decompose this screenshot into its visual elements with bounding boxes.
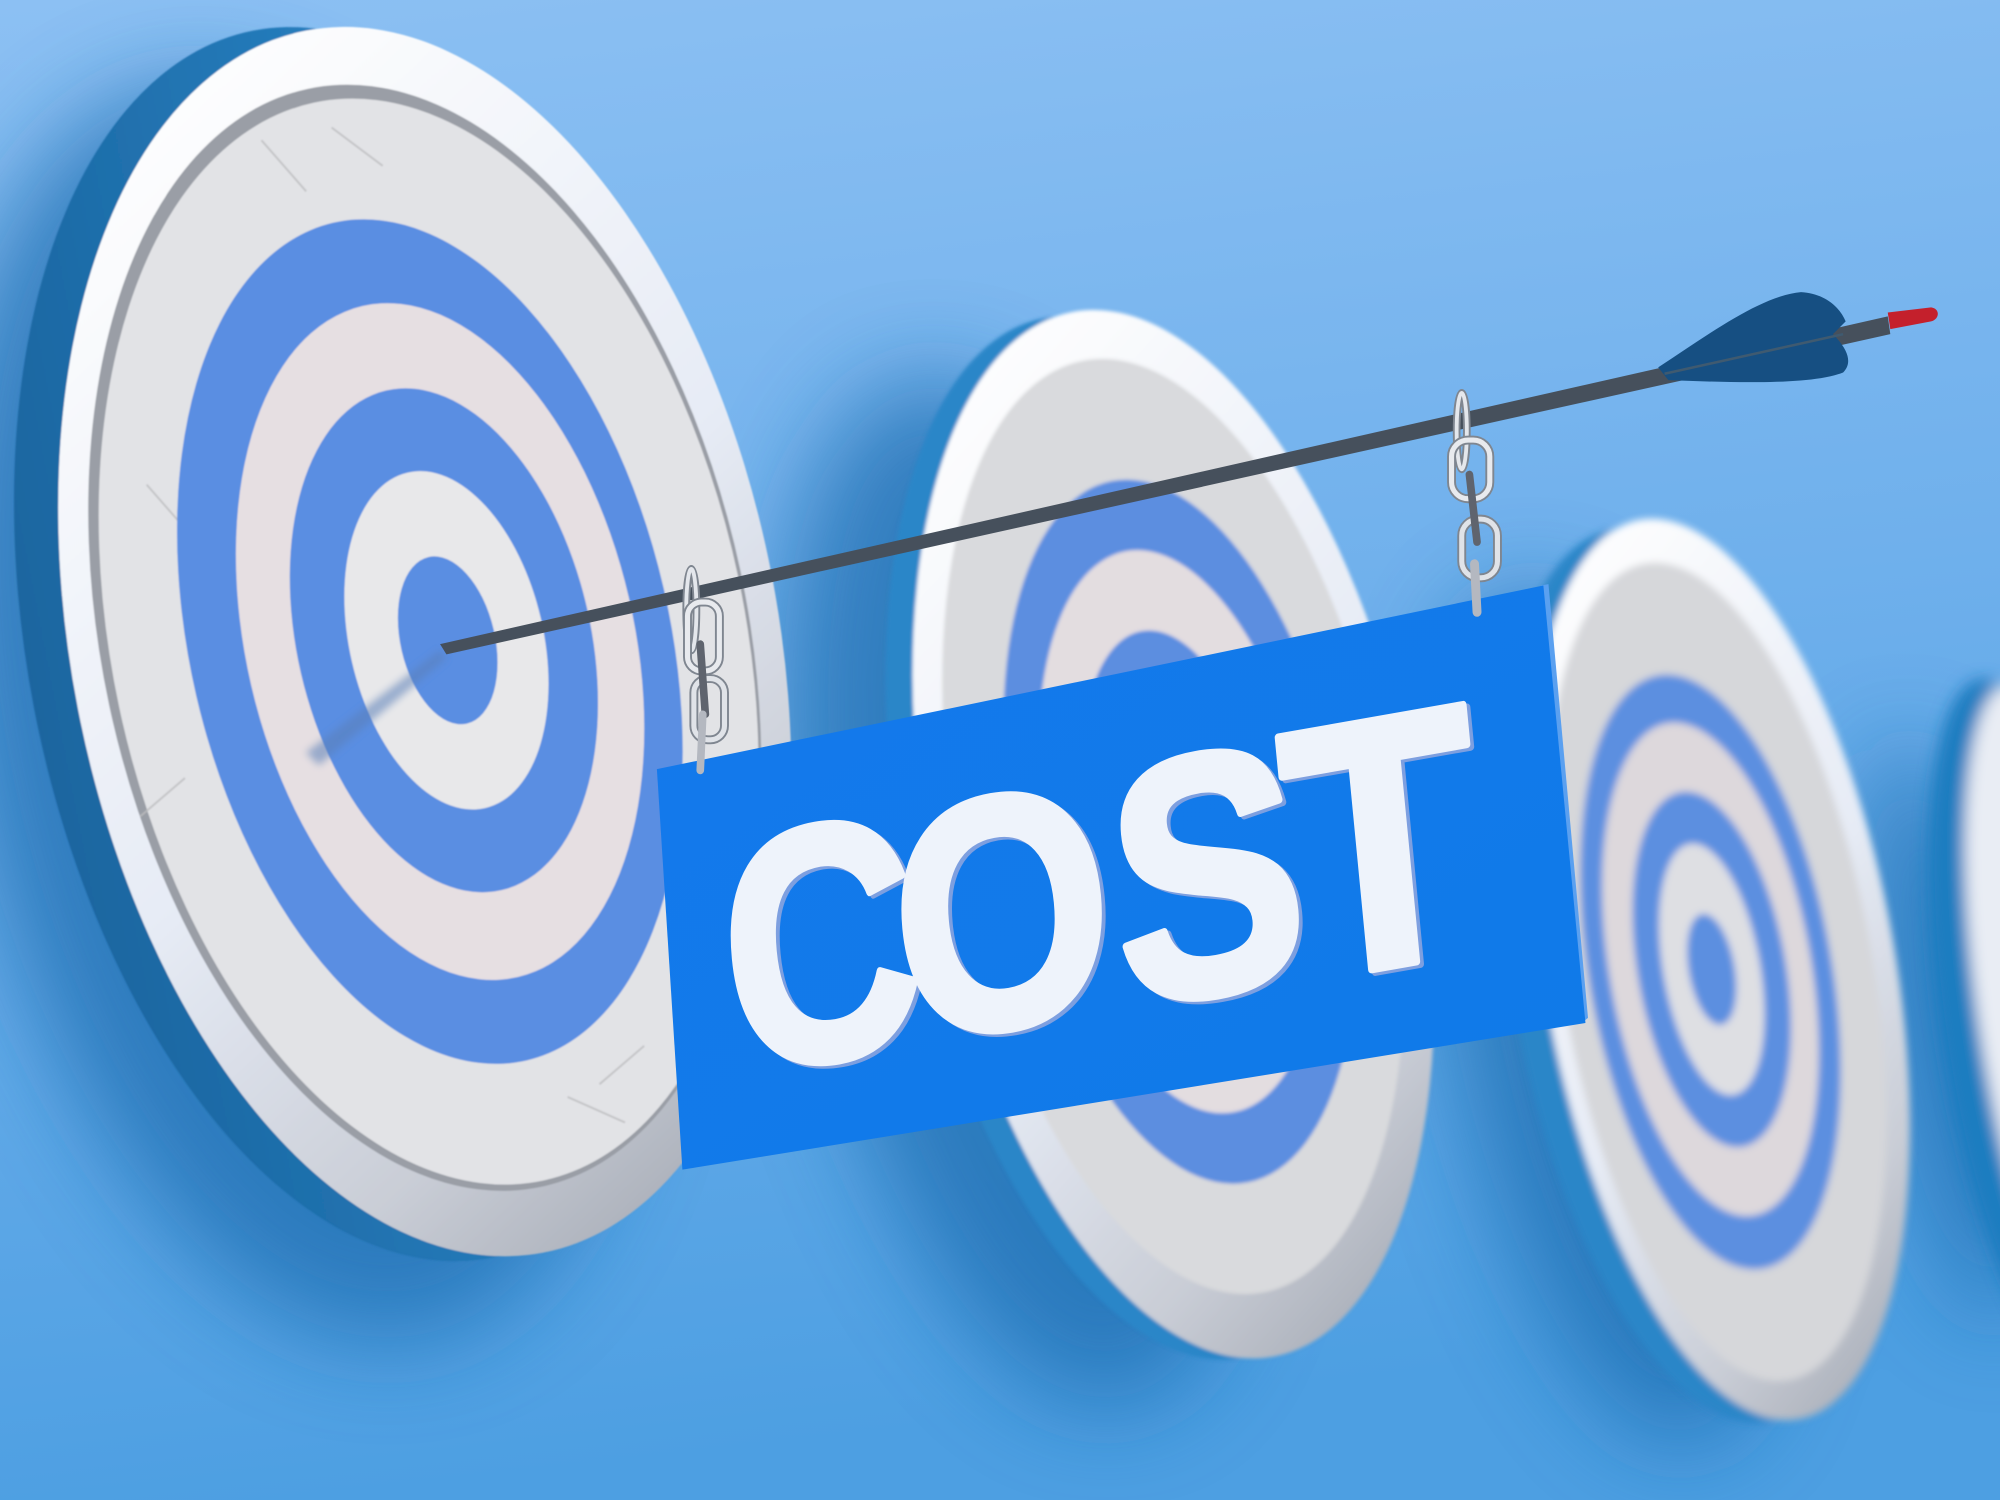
arrow shadow on target	[306, 651, 446, 765]
arrow shaft	[440, 316, 1890, 654]
letter shadows: S	[1098, 670, 1324, 1084]
arrow	[440, 292, 1938, 654]
letters	[706, 626, 1497, 1147]
letter shadows: C	[710, 743, 939, 1149]
face scratches	[140, 128, 644, 1122]
sign face	[657, 585, 1585, 1170]
target 2: mid	[805, 265, 1515, 1404]
target 4: far right	[1892, 667, 2000, 1374]
sign board	[657, 584, 1588, 1170]
letter shadows: T	[1271, 629, 1501, 1061]
chain: right	[1452, 393, 1497, 612]
arrow nock	[1888, 307, 1938, 329]
arrow fletching	[1658, 292, 1848, 382]
letter shadows: O	[880, 712, 1131, 1117]
sign lettering	[706, 626, 1501, 1149]
target 1: front	[0, 0, 890, 1323]
letters: O	[877, 710, 1127, 1114]
letters: T	[1267, 626, 1497, 1058]
sign edge	[1541, 584, 1588, 1023]
letters: S	[1094, 668, 1320, 1081]
letters: C	[706, 740, 935, 1147]
chain: left	[686, 569, 724, 770]
target 3: blurred	[1436, 489, 1972, 1453]
letter shadows	[710, 629, 1501, 1149]
